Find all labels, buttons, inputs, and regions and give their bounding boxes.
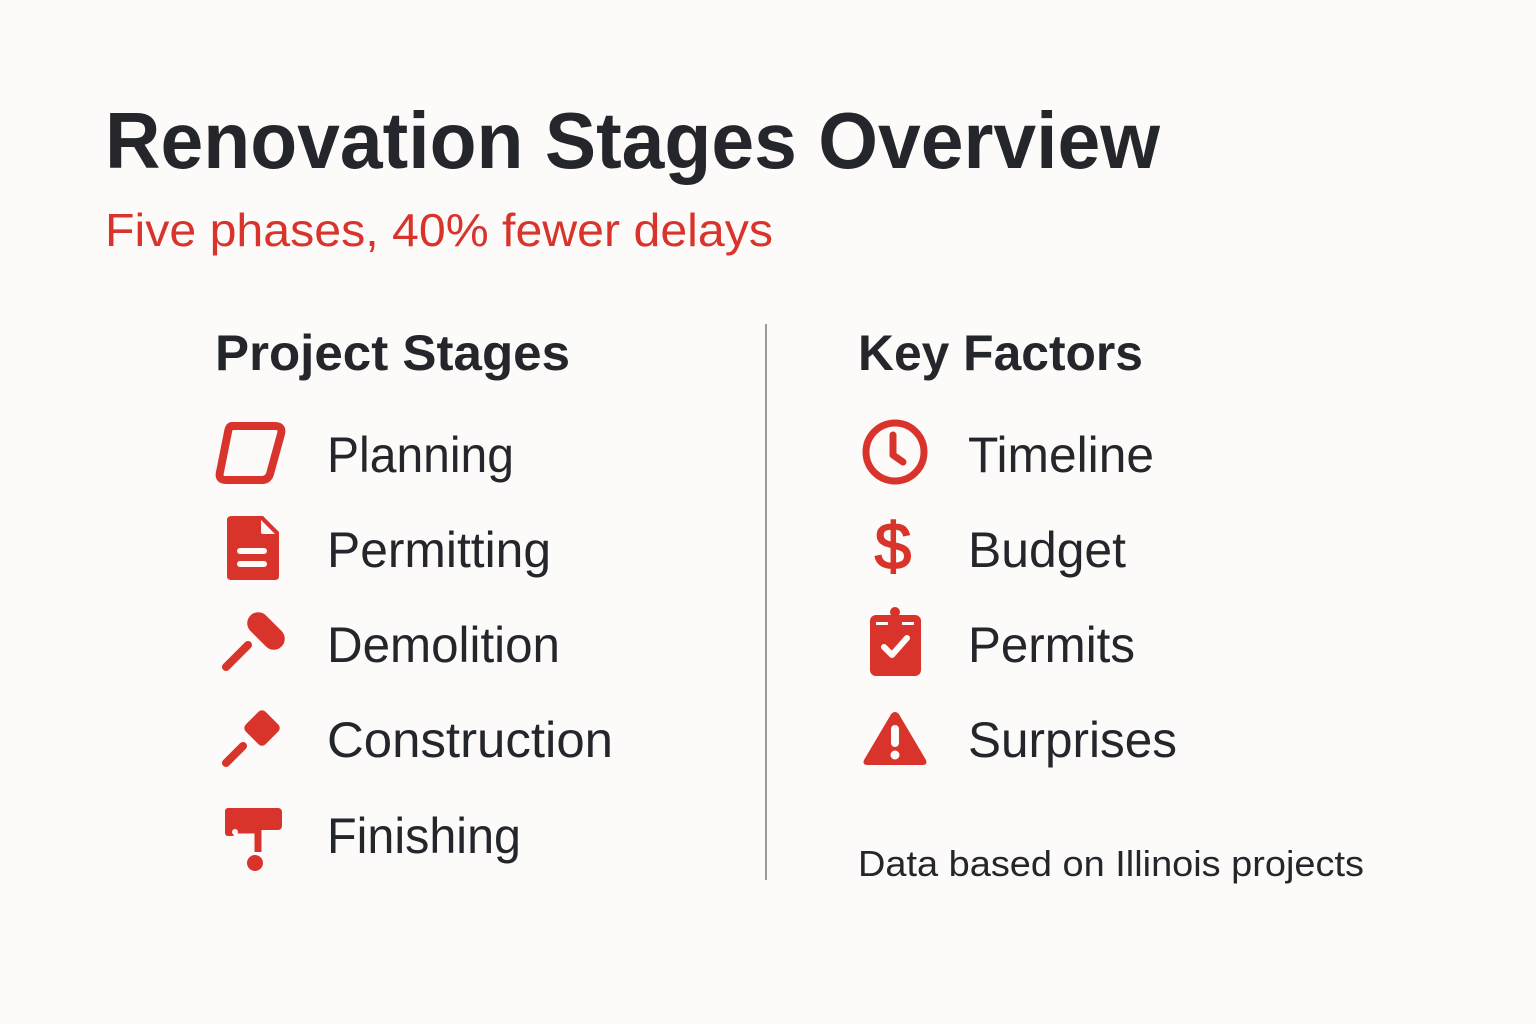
title: Renovation Stages Overview bbox=[105, 96, 1161, 185]
icon: permitting bbox=[227, 516, 279, 580]
factor labels: Timeline bbox=[968, 427, 1154, 483]
footnote: Data based on Illinois projects bbox=[858, 843, 1364, 884]
factor labels bbox=[968, 427, 1177, 768]
stage labels: Permitting bbox=[327, 522, 551, 578]
stage labels: Demolition bbox=[327, 617, 560, 673]
factor labels: Permits bbox=[968, 617, 1135, 673]
icon: construction bbox=[226, 708, 282, 763]
panel: key factors bbox=[864, 423, 926, 765]
icon: finishing bbox=[225, 808, 282, 871]
heading: project stages: Project Stages bbox=[215, 325, 570, 381]
icon: planning bbox=[220, 426, 281, 480]
factor labels: Surprises bbox=[968, 712, 1177, 768]
stage labels: Construction bbox=[327, 712, 613, 768]
stage labels: Planning bbox=[327, 427, 514, 483]
icon: demolition bbox=[226, 608, 289, 667]
icon: warning bbox=[864, 712, 926, 765]
icon: clipboard bbox=[870, 607, 921, 676]
icon: clock bbox=[866, 423, 924, 481]
stage labels bbox=[327, 427, 613, 864]
icon: dollar: $ bbox=[875, 509, 911, 583]
subtitle: Five phases, 40% fewer delays bbox=[105, 204, 773, 256]
stage labels: Finishing bbox=[327, 808, 521, 864]
factor labels: Budget bbox=[968, 522, 1126, 578]
heading: key factors: Key Factors bbox=[858, 325, 1143, 381]
panel: project stages bbox=[220, 426, 289, 871]
